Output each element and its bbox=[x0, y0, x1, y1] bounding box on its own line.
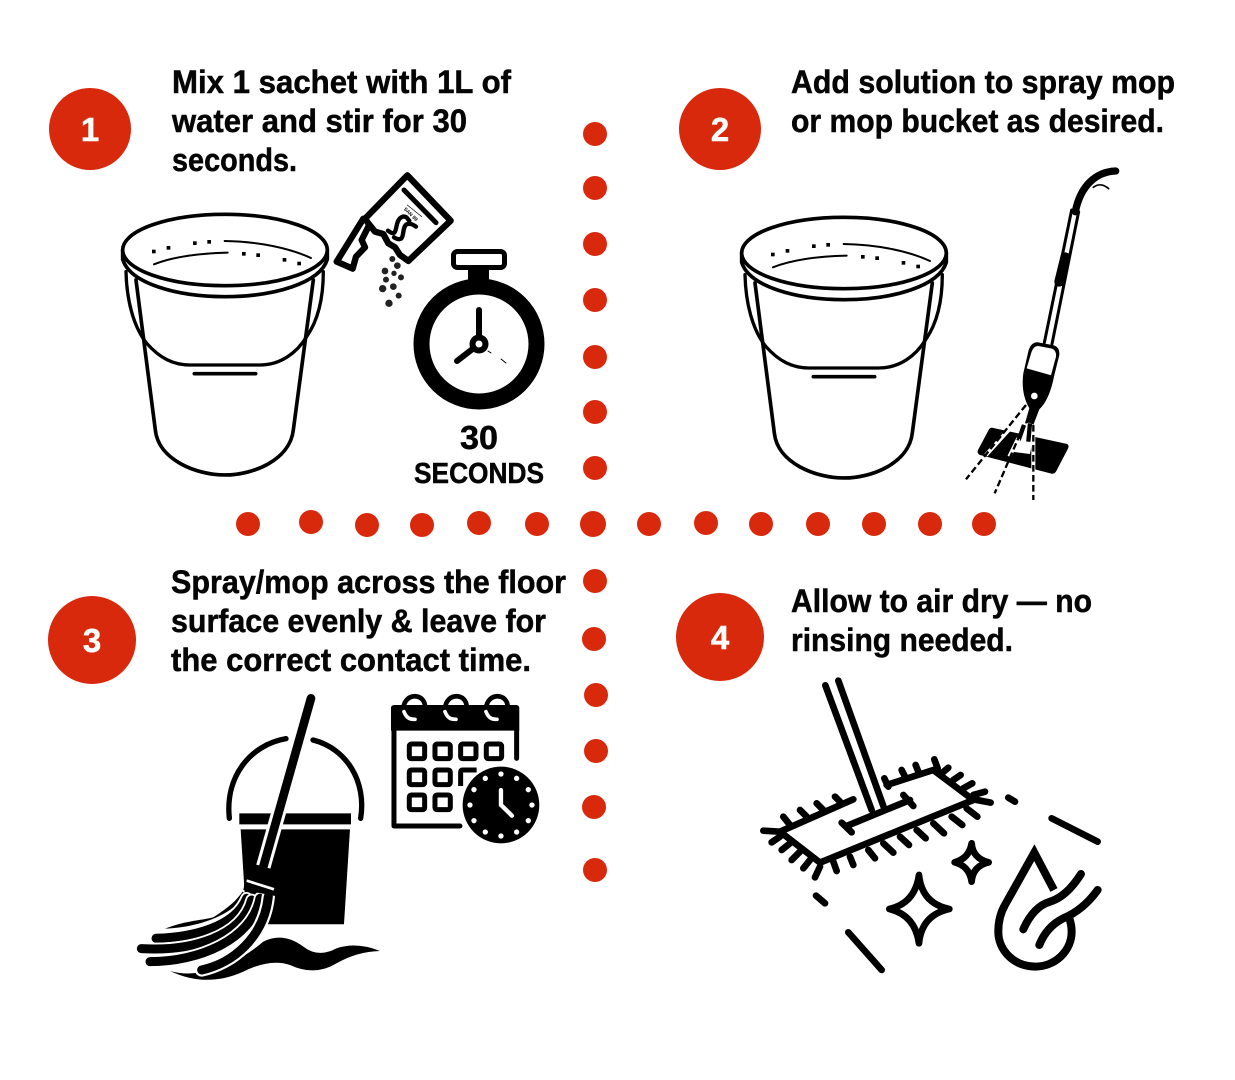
icon: water drop bbox=[998, 853, 1098, 967]
icon: sachet pouring powder bbox=[337, 175, 451, 307]
badge 4: 4 bbox=[711, 619, 730, 656]
icon: stopwatch bbox=[422, 252, 536, 402]
step 4 instruction: rinsing needed. bbox=[791, 622, 1013, 658]
icon: calendar with clock bbox=[391, 696, 539, 843]
badge 1 bbox=[49, 88, 131, 170]
step 2 instruction: or mop bucket as desired. bbox=[791, 103, 1164, 139]
badge 4 bbox=[676, 593, 764, 681]
step 3 instruction bbox=[171, 564, 566, 678]
30 seconds label: 30 bbox=[460, 419, 498, 456]
icon: spray mop bbox=[966, 171, 1116, 500]
step 3 instruction: Spray/mop across the floor bbox=[171, 564, 566, 600]
panel: step 1 bbox=[49, 64, 544, 490]
badge 2 bbox=[679, 88, 761, 170]
step 2 instruction: Add solution to spray mop bbox=[791, 64, 1175, 100]
badge 3: 3 bbox=[83, 622, 101, 659]
icon: bucket bbox=[123, 214, 327, 475]
step 4 instruction bbox=[791, 583, 1092, 658]
panel: step 4 bbox=[676, 583, 1098, 970]
step 1 instruction: water and stir for 30 bbox=[171, 103, 467, 139]
icon: flat mop on floor bbox=[763, 681, 1098, 970]
step 1 instruction bbox=[171, 64, 511, 178]
badge 1: 1 bbox=[81, 111, 99, 148]
badge 2: 2 bbox=[711, 111, 729, 148]
step 1 instruction: Mix 1 sachet with 1L of bbox=[172, 64, 511, 100]
badge 3 bbox=[48, 596, 136, 684]
30 seconds label: SECONDS bbox=[414, 458, 544, 490]
step 4 instruction: Allow to air dry — no bbox=[791, 583, 1092, 619]
panel: step 3 bbox=[48, 564, 566, 980]
dotted cross divider bbox=[236, 122, 996, 882]
icon: sparkles bbox=[889, 843, 989, 943]
icon: bucket bbox=[742, 217, 946, 478]
step 2 instruction bbox=[791, 64, 1175, 139]
panel: step 2 bbox=[679, 64, 1175, 500]
step 3 instruction: the correct contact time. bbox=[171, 642, 531, 678]
step 3 instruction: surface evenly & leave for bbox=[171, 603, 546, 639]
icon: sachet pouring powder: SAN 99 bbox=[402, 206, 419, 223]
icon: bucket with mop bbox=[141, 698, 380, 980]
step 1 instruction: seconds. bbox=[172, 142, 297, 178]
30 seconds label bbox=[414, 419, 544, 490]
